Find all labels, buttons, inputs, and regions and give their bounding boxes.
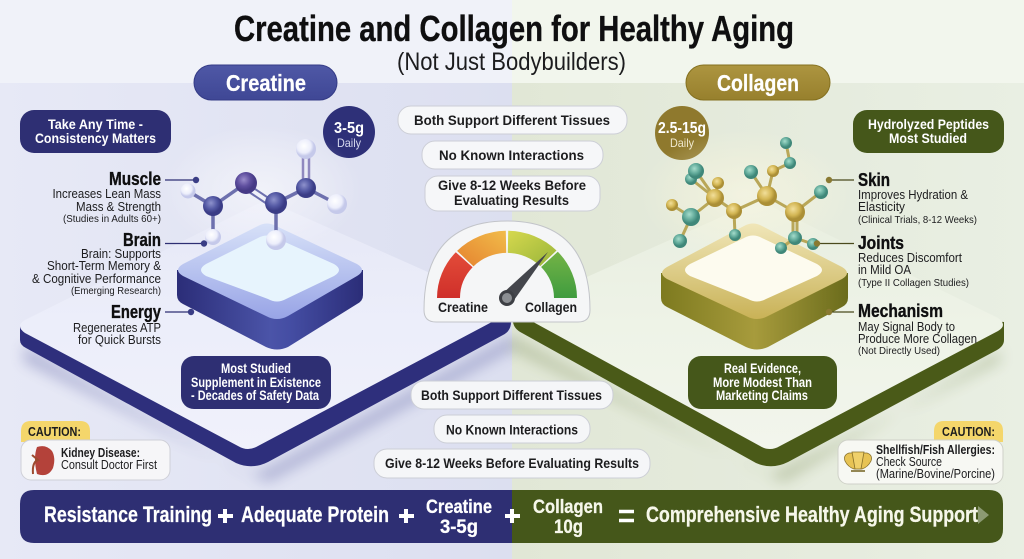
badge: creatine dose <box>323 106 375 158</box>
text block: mechanism <box>858 301 977 357</box>
callout: real evidence: Marketing Claims <box>716 387 808 403</box>
badge: creatine dose: Daily <box>337 136 361 150</box>
callout: take any time <box>20 110 171 153</box>
text block: muscle: (Studies in Adults 60+) <box>63 213 161 225</box>
caution: shellfish: Shellfish/Fish Allergies: <box>876 443 995 457</box>
heading: collagen <box>686 65 830 100</box>
equation bar: 3-5g <box>440 517 478 538</box>
heading: creatine: Creatine <box>226 70 306 96</box>
text block: brain: & Cognitive Performance <box>32 272 161 286</box>
text block: joints <box>858 233 969 289</box>
callout: hydrolyzed peptides: Hydrolyzed Peptides <box>868 116 989 132</box>
caution: kidney: Consult Doctor First <box>61 458 157 472</box>
callout: most studied: - Decades of Safety Data <box>191 387 319 403</box>
text block: skin: Improves Hydration & <box>858 188 969 202</box>
heading: collagen: Collagen <box>717 70 799 96</box>
caution: kidney: CAUTION: <box>28 425 81 439</box>
equation bar: Adequate Protein <box>241 502 389 527</box>
callout: hydrolyzed peptides <box>853 110 1004 153</box>
center callouts top: Evaluating Results <box>454 192 569 208</box>
text block: muscle <box>52 169 161 225</box>
callout: most studied <box>181 356 331 409</box>
subtitle: (Not Just Bodybuilders) <box>397 48 626 76</box>
equation bar: Collagen <box>533 497 603 518</box>
caution: shellfish: CAUTION: <box>942 425 995 439</box>
equation bar <box>20 490 1003 543</box>
equation bar: 10g <box>554 517 583 538</box>
text block: energy <box>73 302 161 347</box>
center callouts bottom <box>374 381 650 478</box>
text block: muscle: Increases Lean Mass <box>52 187 161 201</box>
equation bar: Resistance Training <box>44 502 212 527</box>
text block: joints: in Mild OA <box>858 263 912 277</box>
text block: joints: (Type II Collagen Studies) <box>858 277 969 289</box>
badge: collagen dose: Daily <box>670 136 694 150</box>
caution: kidney <box>21 421 170 480</box>
text block: skin: (Clinical Trials, 8-12 Weeks) <box>858 214 977 226</box>
callout: real evidence <box>688 356 837 409</box>
collagen pedestal <box>640 130 850 350</box>
center callouts top: Give 8-12 Weeks Before <box>438 177 586 193</box>
text block: mechanism: Produce More Collagen <box>858 332 977 346</box>
text block: joints: Joints <box>858 233 904 253</box>
caution: shellfish: Check Source <box>876 455 942 469</box>
text block: brain: Short-Term Memory & <box>47 259 162 273</box>
gauge: Collagen <box>525 299 577 315</box>
text block: mechanism: (Not Directly Used) <box>858 345 940 357</box>
creatine pedestal <box>162 125 363 350</box>
callout: most studied: Supplement in Existence <box>191 374 321 390</box>
leader lines: creatine <box>165 177 207 315</box>
badge: creatine dose: 3-5g <box>334 120 364 137</box>
gauge: Creatine <box>438 299 488 315</box>
text block: muscle: Mass & Strength <box>76 200 161 214</box>
equation bar: Creatine <box>426 497 492 518</box>
badge: collagen dose <box>655 106 709 160</box>
title: Creatine and Collagen for Healthy Aging <box>234 8 794 49</box>
icon: kidney <box>32 446 54 475</box>
center callouts bottom: Both Support Different Tissues <box>421 387 602 403</box>
badge: collagen dose: 2.5-15g <box>658 120 706 137</box>
heading: creatine <box>194 65 337 100</box>
text block: brain: Brain: Supports <box>81 247 161 261</box>
text block: muscle: Muscle <box>109 169 161 189</box>
text block: energy: Energy <box>111 302 161 322</box>
text block: mechanism: May Signal Body to <box>858 320 955 334</box>
caution: shellfish <box>838 421 1003 484</box>
text block: brain: Brain <box>123 230 161 250</box>
text block: skin: Skin <box>858 170 890 190</box>
caution: kidney: Kidney Disease: <box>61 446 140 460</box>
text block: brain <box>32 230 162 297</box>
panel: collagen platform <box>512 202 1004 482</box>
center callouts top: Both Support Different Tissues <box>414 112 610 128</box>
panel: creatine platform <box>20 202 512 482</box>
text block: skin <box>858 170 977 226</box>
text block: joints: Reduces Discomfort <box>858 251 962 265</box>
callout: take any time: Take Any Time - <box>48 116 143 132</box>
callout: real evidence: More Modest Than <box>713 374 812 390</box>
icon: shell trophy <box>844 452 872 471</box>
text block: brain: (Emerging Research) <box>71 285 161 297</box>
leader lines: collagen <box>814 177 854 315</box>
callout: hydrolyzed peptides: Most Studied <box>889 130 967 146</box>
caution: shellfish: (Marine/Bovine/Porcine) <box>876 467 995 481</box>
text block: skin: Elasticity <box>858 200 906 214</box>
gauge <box>424 221 590 322</box>
center callouts bottom: Give 8-12 Weeks Before Evaluating Results <box>385 455 639 471</box>
center callouts top <box>398 106 627 211</box>
icon: creatine molecule <box>180 139 347 250</box>
center callouts top: No Known Interactions <box>439 147 584 163</box>
text block: mechanism: Mechanism <box>858 301 943 321</box>
callout: real evidence: Real Evidence, <box>724 360 801 376</box>
callout: take any time: Consistency Matters <box>35 130 156 146</box>
text block: energy: Regenerates ATP <box>73 321 161 335</box>
icon: collagen molecule <box>666 137 828 254</box>
text block: energy: for Quick Bursts <box>78 333 161 347</box>
callout: most studied: Most Studied <box>221 360 291 376</box>
center callouts bottom: No Known Interactions <box>446 422 578 438</box>
